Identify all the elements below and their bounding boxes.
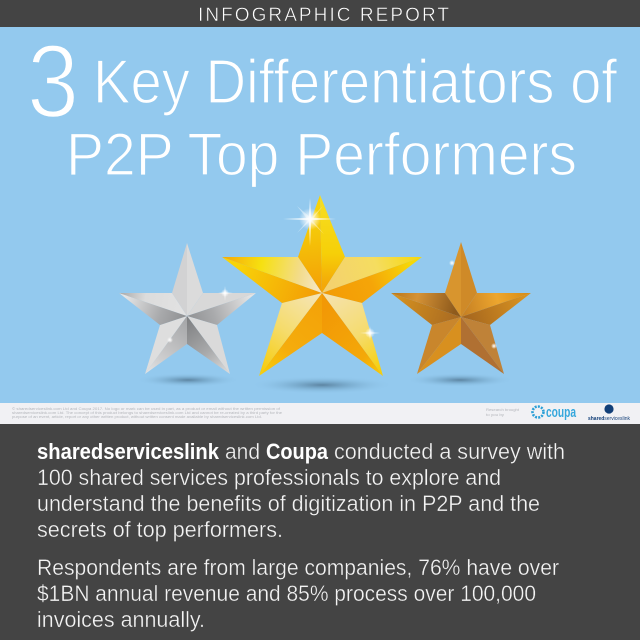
header bar [0, 0, 640, 27]
research note: to you by [486, 412, 504, 417]
paragraph: respondents: $1BN annual revenue and 85% process over 100,000 [37, 581, 536, 606]
paragraph: survey intro [37, 439, 565, 542]
research note [486, 407, 520, 417]
copyright note: © sharedserviceslink.com Ltd and Coupa 2017. No logo or mark can be used in part, as a product or email without the written permission of [12, 406, 281, 411]
paragraph: respondents [37, 555, 559, 632]
title: 3 [27, 24, 79, 140]
copyright note [12, 406, 283, 419]
silver star [119, 243, 256, 374]
paragraph: survey intro: secrets of top performers. [37, 517, 283, 542]
paragraph: survey intro: and [225, 439, 260, 464]
research note: Research brought [486, 407, 520, 412]
paragraph: survey intro: 100 shared services professionals to explore and [37, 465, 501, 490]
paragraph: survey intro: Coupa [266, 439, 329, 464]
gold star [222, 195, 422, 376]
title: P2P Top Performers [66, 121, 577, 188]
star shadows [136, 373, 514, 394]
copyright note: sharedserviceslink.com Ltd. The concept of this product belongs to sharedserviceslink.com Ltd and cannot be re-created by a third party for the [12, 410, 283, 415]
logo: coupa [532, 405, 577, 421]
body panel [0, 424, 640, 640]
paragraph: survey intro: understand the benefits of digitization in P2P and the [37, 491, 540, 516]
paragraph: survey intro: sharedserviceslink [37, 439, 220, 464]
paragraph: respondents: Respondents are from large companies, 76% have over [37, 555, 559, 580]
paragraph: survey intro: conducted a survey with [334, 439, 565, 464]
copyright note: purpose of an event, article, report or any other written product, without written consent made available by sharedserviceslink.com Ltd. [12, 414, 262, 419]
logo: sharedserviceslink [588, 404, 630, 422]
sparkles [167, 198, 497, 349]
footer strip [0, 403, 640, 424]
logo: coupa: coupa [546, 405, 577, 421]
hero panel [0, 27, 640, 403]
title [27, 24, 618, 188]
bronze star [391, 242, 531, 374]
logo: sharedserviceslink: sharedserviceslink [588, 416, 630, 422]
paragraph: respondents: invoices annually. [37, 607, 205, 632]
header label: INFOGRAPHIC REPORT [198, 5, 449, 26]
